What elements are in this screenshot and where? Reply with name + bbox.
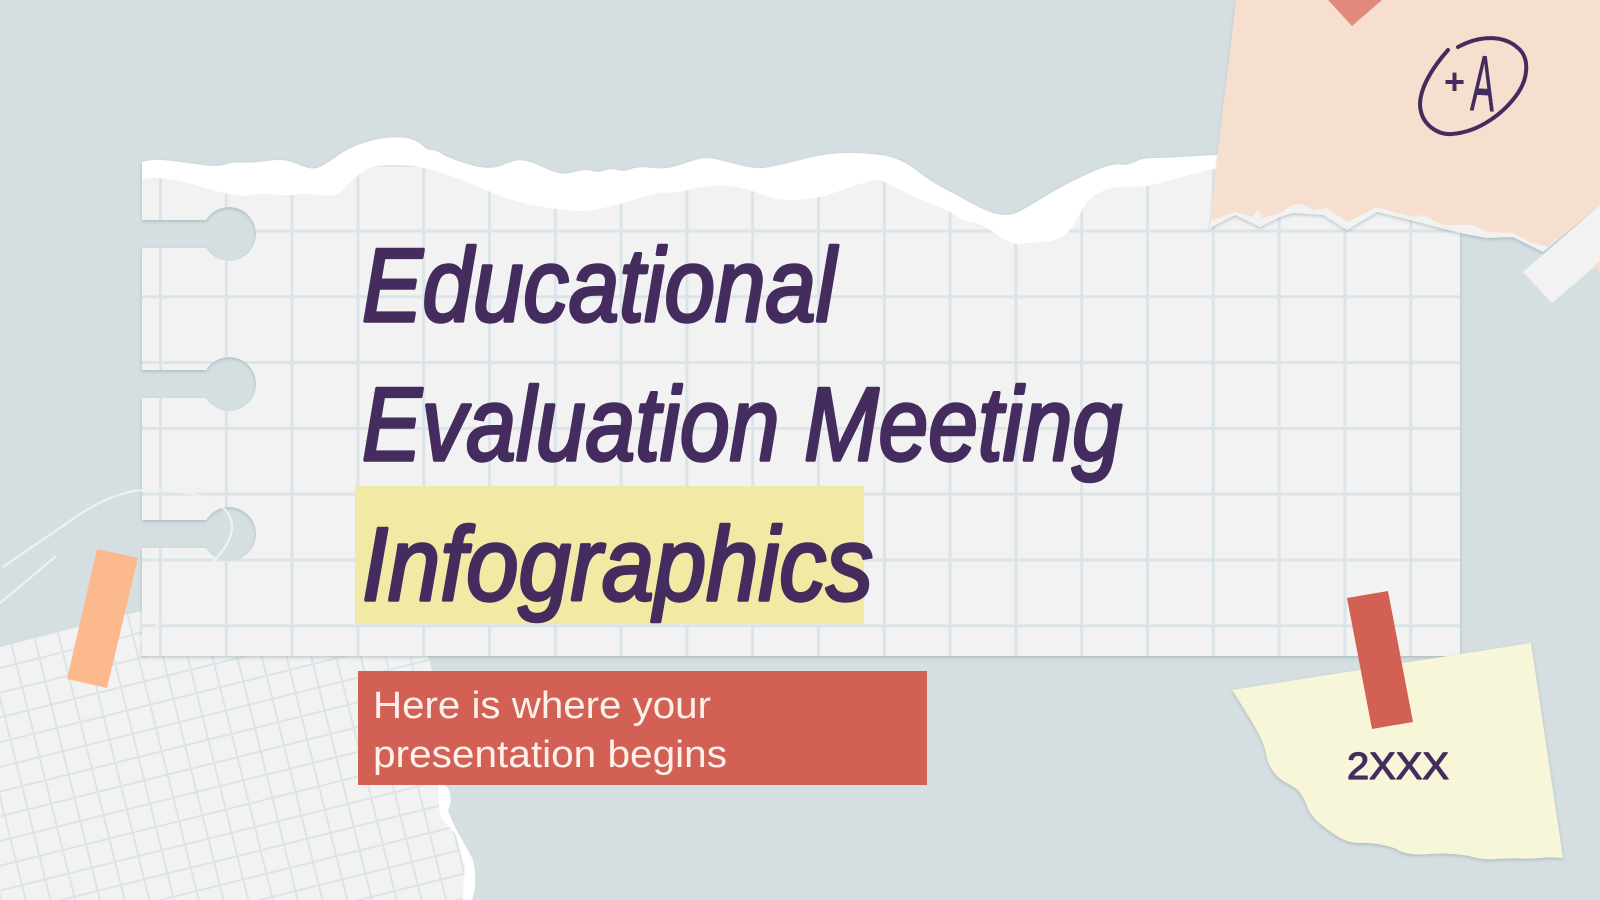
date label: 2XXX bbox=[1347, 746, 1449, 788]
title line 3: Infographics bbox=[362, 507, 873, 623]
grade stamp bbox=[1420, 38, 1526, 134]
main notebook paper bbox=[142, 137, 1460, 656]
orange tape bbox=[67, 549, 138, 688]
subtitle box bbox=[358, 671, 927, 785]
white tape, right edge bbox=[1523, 205, 1600, 303]
grade stamp: A bbox=[1469, 39, 1497, 128]
string threads bbox=[0, 490, 232, 640]
subtitle line 1: Here is where your bbox=[373, 685, 711, 727]
title heading bbox=[355, 228, 1122, 624]
peach torn note, top right bbox=[1210, 0, 1600, 252]
peach sheet bbox=[1210, 0, 1600, 247]
title line 2: Evaluation Meeting bbox=[362, 367, 1122, 483]
torn white edge bbox=[142, 137, 1460, 656]
title line 1: Educational bbox=[362, 228, 839, 344]
grey sheet with grid bbox=[142, 150, 1460, 656]
subtitle line 2: presentation begins bbox=[373, 734, 727, 776]
pink heart tip bbox=[1328, 0, 1382, 26]
red tape bbox=[1347, 591, 1413, 729]
small grid paper, bottom left bbox=[0, 560, 475, 900]
yellow torn note bbox=[1232, 643, 1563, 859]
title highlight bbox=[355, 486, 864, 624]
grade stamp: + bbox=[1444, 61, 1465, 102]
torn white underside bbox=[1210, 0, 1600, 252]
